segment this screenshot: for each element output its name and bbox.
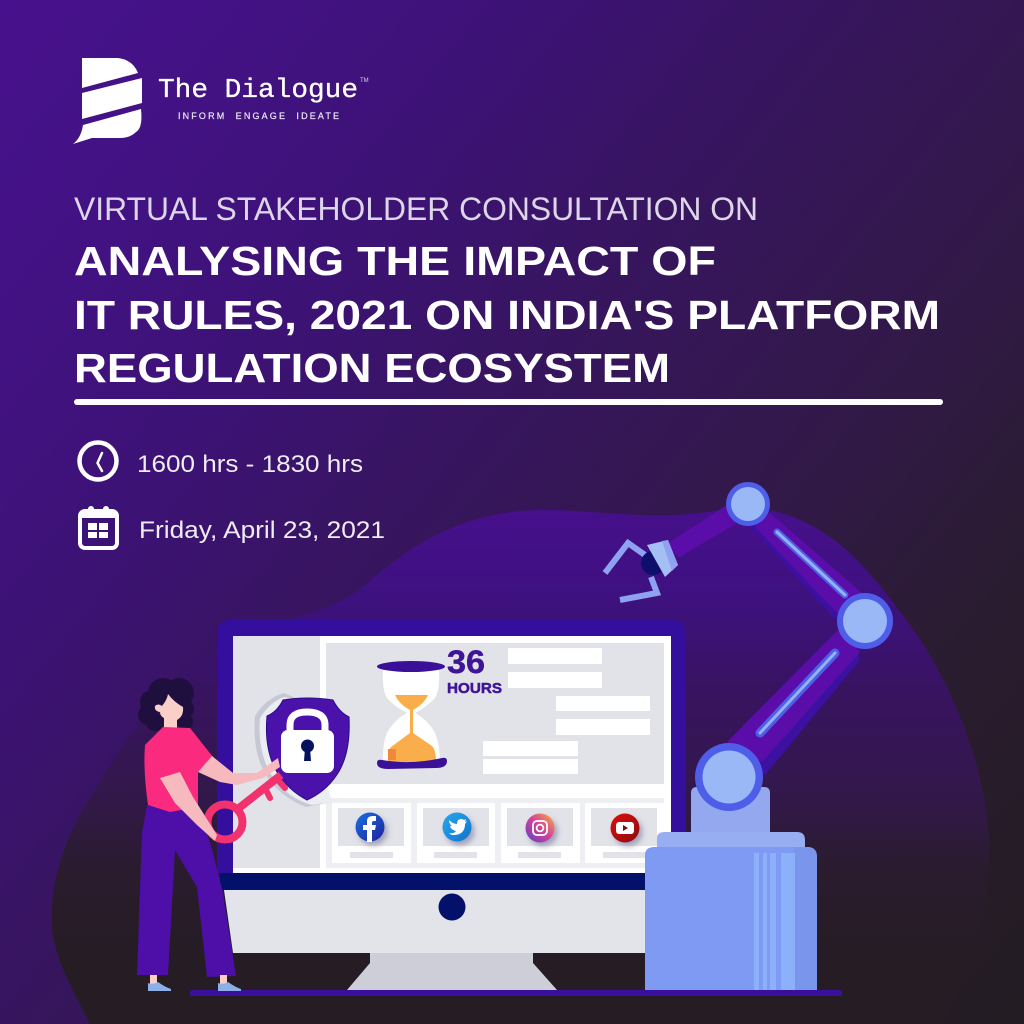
main title: REGULATION ECOSYSTEM bbox=[74, 345, 670, 391]
icon: hourglass bbox=[377, 661, 447, 769]
social cards bbox=[332, 803, 664, 863]
logo bbox=[73, 58, 369, 144]
icon: youtube bbox=[610, 814, 640, 842]
neck and face bbox=[155, 694, 183, 733]
36 hours label: HOURS bbox=[447, 681, 502, 697]
title rule bbox=[74, 399, 943, 405]
monitor bbox=[217, 620, 686, 990]
lower arm shadow bbox=[750, 650, 860, 775]
icon: twitter bbox=[442, 812, 472, 842]
lower arm bbox=[727, 628, 860, 762]
left panel bbox=[233, 636, 320, 868]
icon: shield with lock bbox=[255, 693, 349, 807]
icon: clock bbox=[80, 442, 116, 480]
text placeholder bars bbox=[483, 648, 650, 774]
background blob bbox=[52, 508, 989, 1024]
upper arm bbox=[755, 513, 870, 618]
logo tagline: INFORM ENGAGE IDEATE bbox=[178, 111, 339, 121]
event subtitle: VIRTUAL STAKEHOLDER CONSULTATION ON bbox=[74, 191, 758, 227]
ground line bbox=[190, 990, 842, 996]
screen bbox=[233, 636, 671, 873]
logo wordmark: The Dialogue bbox=[158, 76, 358, 106]
robot base bbox=[645, 787, 817, 990]
gripper bbox=[605, 540, 678, 600]
main title: IT RULES, 2021 ON INDIA'S PLATFORM bbox=[74, 292, 940, 338]
arms bbox=[160, 756, 280, 841]
joint middle bbox=[837, 593, 893, 649]
main title: ANALYSING THE IMPACT OF bbox=[74, 238, 716, 284]
hair bbox=[138, 678, 194, 731]
upper arm shadow bbox=[748, 518, 845, 622]
cards band bbox=[326, 798, 664, 868]
lower arm light stripe bbox=[760, 653, 835, 733]
joint bottom bbox=[695, 743, 763, 811]
shoes bbox=[148, 975, 241, 991]
woman with key bbox=[137, 678, 285, 991]
forearm to gripper bbox=[668, 505, 737, 558]
shirt bbox=[144, 727, 213, 812]
robot arm bbox=[605, 482, 893, 990]
key bbox=[208, 775, 285, 840]
monitor navy bar bbox=[220, 873, 660, 890]
36 hours label bbox=[447, 644, 502, 697]
time text: 1600 hrs - 1830 hrs bbox=[137, 451, 363, 478]
upper arm light stripe bbox=[777, 532, 845, 595]
date text: Friday, April 23, 2021 bbox=[139, 517, 385, 544]
monitor frame bbox=[217, 620, 686, 873]
power button bbox=[438, 894, 466, 920]
pants bbox=[137, 805, 236, 977]
icon: facebook bbox=[356, 812, 384, 842]
main title bbox=[74, 238, 940, 391]
trademark: TM bbox=[360, 78, 369, 84]
date row bbox=[80, 506, 385, 548]
icon: instagram bbox=[526, 814, 554, 842]
main panel bbox=[326, 643, 664, 784]
icon: calendar bbox=[80, 506, 117, 548]
logo mark bbox=[73, 58, 142, 144]
time row bbox=[80, 442, 363, 480]
joint top bbox=[726, 482, 770, 526]
monitor chin bbox=[224, 890, 660, 953]
monitor stand bbox=[347, 953, 557, 990]
36 hours label: 36 bbox=[447, 644, 485, 680]
